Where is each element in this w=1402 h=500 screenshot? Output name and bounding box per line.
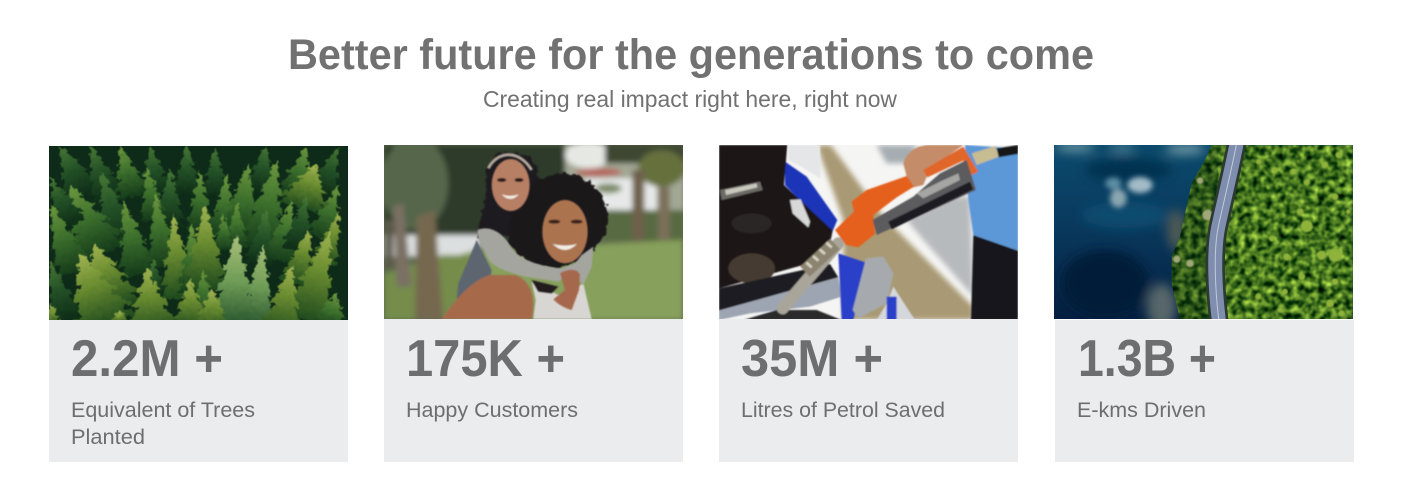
- orange nozzle body: [835, 176, 914, 247]
- child face: [492, 159, 530, 211]
- label: e-kms driven: E-kms Driven: [1077, 399, 1206, 422]
- label: happy customers: Happy Customers: [406, 399, 578, 422]
- card: trees planted: [31, 136, 356, 462]
- woman face: [542, 200, 588, 263]
- blue tank: [838, 253, 868, 320]
- label: equivalent of trees: Equivalent of Trees: [71, 399, 255, 422]
- photo: mother carrying daughter in a park: [384, 145, 683, 319]
- subtitle: Creating real impact right here, right now: [483, 86, 897, 112]
- panel background: petrol: [719, 319, 1018, 462]
- child sweater: [478, 228, 593, 285]
- woman shoulder and arm: [442, 275, 533, 319]
- white bodywork: [788, 145, 821, 178]
- stat: 2.2M: 2.2M +: [71, 330, 223, 388]
- stat: 35M: 35M +: [741, 330, 883, 388]
- forest canopy: [1168, 145, 1353, 320]
- child hair and back: [478, 152, 539, 237]
- hose and coupling: [972, 146, 999, 165]
- card: e-kms driven: [1054, 143, 1354, 462]
- woman hair: [508, 173, 608, 268]
- shirt: [965, 145, 1018, 251]
- label: litres of petrol saved: Litres of Petrol Saved: [741, 399, 945, 422]
- child jeans: [457, 240, 492, 300]
- fuel spout: [783, 243, 838, 308]
- hand: [903, 145, 963, 187]
- panel background: e-kms: [1055, 320, 1354, 462]
- card: happy customers: [382, 137, 685, 462]
- orange upper arm: [923, 147, 978, 177]
- woman hair over neck: [532, 280, 558, 293]
- label: planted: Planted: [71, 426, 145, 449]
- lower trim: [719, 264, 838, 311]
- photo: aerial road between lake and forest: [1054, 145, 1353, 319]
- child headband: [488, 155, 532, 170]
- trousers: [971, 235, 1018, 320]
- infographic page: [49, 38, 1354, 462]
- panel background: customers: [384, 319, 683, 462]
- grey handle: [873, 160, 976, 235]
- woman top: [532, 282, 592, 319]
- woman hand: [553, 270, 580, 310]
- photo: conifer forest from above: [49, 146, 348, 320]
- open seat hood: [719, 145, 833, 288]
- stat: 1.3B: 1.3B +: [1078, 330, 1216, 388]
- stat: 175K: 175K +: [406, 330, 565, 388]
- blue fairing: [785, 162, 837, 233]
- card: litres of petrol saved: [719, 145, 1018, 462]
- panel background: trees: [49, 320, 348, 462]
- title: Better future for the generations to come: [288, 31, 1094, 79]
- silver tank cover: [853, 257, 893, 318]
- road: [1215, 143, 1237, 322]
- photo: fuel nozzle refuelling a blue scooter: [719, 145, 1018, 319]
